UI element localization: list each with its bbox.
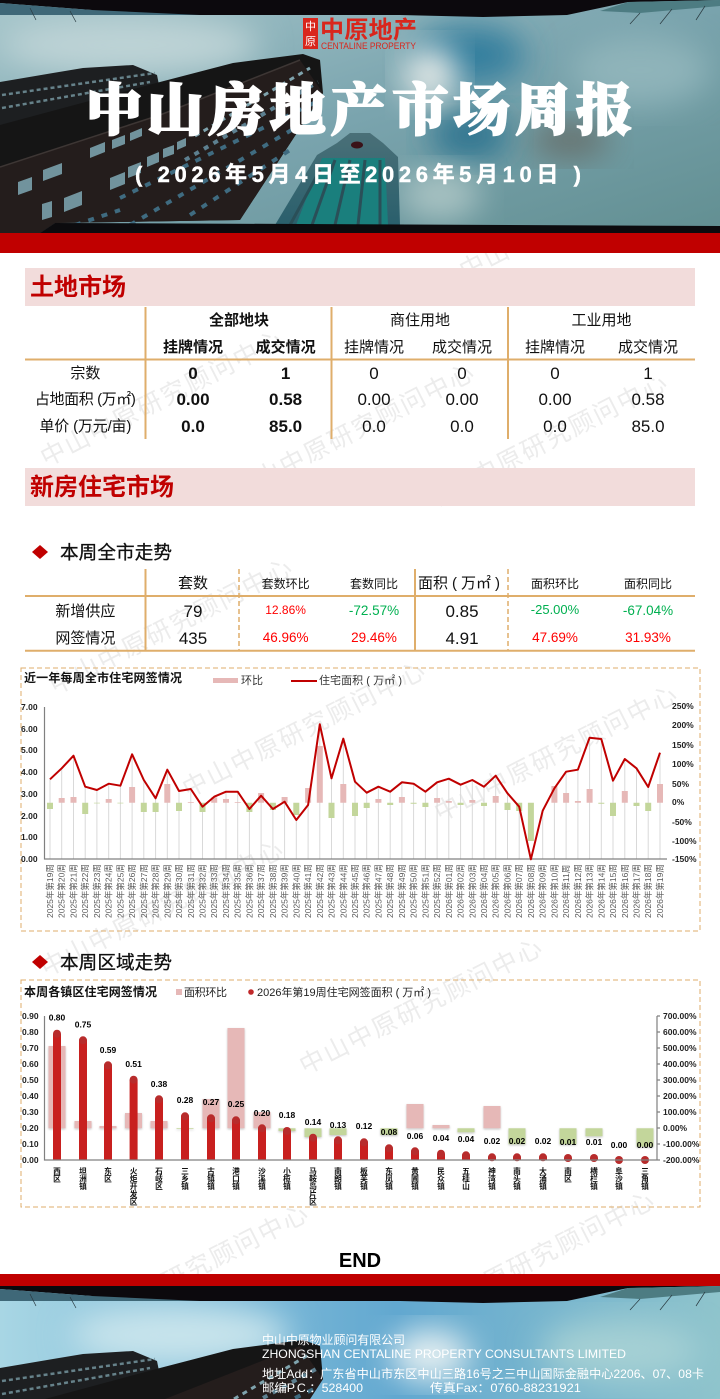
watermark: 中山中原研究顾问中心: [455, 138, 708, 285]
footer contact text: ZHONGSHAN CENTALINE PROPERTY CONSULTANTS LIMITED: [262, 1347, 626, 1361]
week labels: 2025年第35周: [233, 864, 243, 918]
stems: [57, 1034, 594, 1160]
left axis labels: 3.00: [21, 789, 38, 799]
right axis labels: 600.00%: [663, 1027, 697, 1037]
district labels: [52, 1166, 650, 1206]
week labels: 2025年第21周: [68, 864, 78, 918]
right axis labels: 700.00%: [663, 1011, 697, 1021]
land market table: 成交情况: [618, 338, 678, 356]
left axis labels: 0.80: [22, 1027, 39, 1037]
left axis labels: 0.40: [22, 1091, 39, 1101]
right axis labels: -100%: [672, 836, 697, 846]
watermark: 中山中原研究顾问中心: [36, 325, 289, 472]
land market table: 1: [643, 364, 653, 383]
district labels: 横栏镇: [589, 1166, 598, 1191]
value labels: 0.04: [433, 1133, 450, 1143]
pink change bars: [59, 746, 663, 803]
land market table: 0.0: [450, 417, 474, 436]
week labels: 2026年第12周: [573, 864, 583, 918]
district labels: 沙溪镇: [257, 1167, 266, 1191]
weekly city table: 套数: [178, 575, 208, 592]
logo: Centaline Property: 原: [305, 36, 316, 48]
week labels: 2026年第14周: [596, 864, 606, 918]
week labels: 2026年第11周: [561, 865, 571, 918]
left axis labels: 0.10: [22, 1139, 39, 1149]
icon: red diamond: [32, 545, 48, 559]
week labels: 2025年第49周: [397, 864, 407, 918]
value labels: 0.00: [611, 1140, 628, 1150]
left axis labels: 0.30: [22, 1107, 39, 1117]
right axis labels: 0%: [672, 797, 685, 807]
land market table: 挂牌情况: [525, 339, 585, 356]
right axis labels: 200.00%: [663, 1091, 697, 1101]
land market table: 0.0: [543, 417, 567, 436]
district labels: 石岐区: [154, 1167, 164, 1190]
land market table: 85.0: [269, 417, 302, 436]
right axis labels: -100.00%: [663, 1139, 700, 1149]
district labels: 大涌镇: [538, 1166, 548, 1191]
week labels: 2025年第38周: [268, 864, 278, 918]
week labels: 2026年第04周: [479, 864, 489, 918]
watermark: 中山中原研究顾问中心: [61, 1199, 314, 1346]
week labels: 2026年第18周: [643, 864, 653, 918]
left axis labels: 7.00: [21, 702, 38, 712]
value labels: 0.12: [356, 1121, 373, 1131]
value labels: 0.13: [330, 1120, 347, 1130]
weekly city table: 4.91: [445, 629, 479, 648]
week labels: 2025年第43周: [326, 864, 336, 918]
weekly city table: 网签情况: [55, 630, 115, 647]
week labels: 2025年第19周: [45, 864, 55, 918]
value labels: [49, 1012, 654, 1150]
weekly city table: -72.57%: [349, 603, 399, 618]
watermark: 中山中原研究顾问中心: [295, 933, 548, 1080]
weekly city table: 29.46%: [351, 630, 397, 645]
week labels: 2025年第47周: [373, 864, 383, 918]
watermark: 中山中原研究顾问中心: [36, 835, 289, 982]
week labels: 2025年第45周: [350, 864, 360, 918]
weekly city table: 31.93%: [625, 630, 671, 645]
value labels: 0.25: [228, 1099, 245, 1109]
value labels: 0.75: [75, 1020, 92, 1030]
land market table: 0: [550, 364, 560, 383]
legend: 面积环比: [184, 986, 227, 999]
week labels: 2025年第24周: [104, 864, 114, 918]
weekly city table: 套数环比: [262, 576, 310, 591]
value labels: 0.28: [177, 1095, 194, 1105]
week labels: 2025年第32周: [198, 864, 208, 918]
week labels: 2026年第16周: [620, 864, 630, 918]
land market table: 0.00: [176, 390, 210, 409]
left axis labels: [21, 702, 38, 864]
section heading: land market: 土地市场: [30, 274, 126, 301]
red band top: [0, 233, 720, 253]
left axis labels: 0.60: [22, 1059, 39, 1069]
land market table: 0.0: [362, 417, 386, 436]
district labels: 阜沙镇: [614, 1166, 624, 1191]
chart title: 本周各镇区住宅网签情况: [24, 984, 157, 999]
weekly city table: 面积环比: [531, 577, 579, 591]
week labels: 2025年第29周: [162, 864, 172, 918]
value labels: 0.01: [586, 1137, 603, 1147]
week labels: 2025年第39周: [280, 864, 290, 918]
value labels: 0.08: [381, 1127, 398, 1137]
right axis labels: 0.00%: [663, 1123, 688, 1133]
footer contact text: 地址Add：广东省中山市东区中山三路16号之三中山国际金融中心2206、07、08卡: [262, 1366, 704, 1381]
week labels: 2026年第03周: [467, 864, 477, 918]
left axis labels: 0.70: [22, 1043, 39, 1053]
legend: [176, 985, 431, 999]
district labels: 神湾镇: [487, 1166, 496, 1191]
section heading: new housing market: 新房住宅市场: [30, 473, 174, 501]
week labels: 2025年第42周: [315, 864, 325, 918]
value labels: 0.80: [49, 1012, 66, 1022]
right axis labels: 100%: [672, 759, 694, 769]
weekly city table: -67.04%: [623, 603, 673, 618]
footer photo banner: [0, 1286, 720, 1399]
weekly city table: 79: [184, 602, 202, 621]
icon: red diamond: [32, 955, 48, 969]
pink change bars: [48, 1028, 500, 1128]
value labels: 0.51: [125, 1059, 142, 1069]
right axis labels: 400.00%: [663, 1059, 697, 1069]
week labels: 2026年第05周: [491, 864, 501, 918]
week labels: 2025年第27周: [139, 864, 149, 918]
logo: Centaline Property: 中原地产: [320, 17, 417, 44]
land market table: 成交情况: [432, 338, 492, 356]
week labels: 2025年第22周: [80, 864, 90, 918]
legend: 环比: [241, 674, 263, 687]
value labels: 0.14: [305, 1117, 322, 1127]
footer contact text: 传真Fax：0760-88231921: [430, 1380, 581, 1395]
weekly city table: 面积同比: [624, 577, 672, 591]
weekly city table: 46.96%: [263, 630, 308, 645]
week labels: 2026年第01周: [444, 864, 454, 918]
right axis labels: [663, 1011, 700, 1165]
value labels: 0.02: [484, 1136, 501, 1146]
week labels: 2026年第09周: [538, 864, 548, 918]
watermark: 中山中原研究顾问中心: [178, 656, 431, 803]
watermark: 中山中原研究顾问中心: [430, 680, 683, 827]
district labels: 南朗镇: [333, 1166, 342, 1191]
watermark: 中山中原研究顾问中心: [45, 553, 298, 700]
week labels: 2026年第13周: [585, 864, 595, 918]
weekly city table: 套数同比: [350, 576, 398, 591]
value labels: 0.59: [100, 1045, 117, 1055]
district labels: 五桂山: [461, 1167, 470, 1191]
axes: [44, 1016, 660, 1160]
weekly city table: 0.85: [445, 602, 479, 621]
left axis labels: 1.00: [21, 832, 38, 842]
right axis labels: 100.00%: [663, 1107, 697, 1117]
district labels: 港口镇: [231, 1166, 240, 1191]
week labels: 2026年第08周: [526, 864, 536, 918]
value labels: 0.20: [254, 1108, 271, 1118]
left axis labels: 0.20: [22, 1123, 39, 1133]
district labels: 东区: [103, 1166, 112, 1182]
district labels: 三乡镇: [180, 1167, 190, 1191]
week labels: 2025年第31周: [186, 864, 196, 918]
title: 中山房地产市场周报: [86, 67, 632, 147]
weekly city table: 新增供应: [55, 602, 115, 620]
land market table: 0.00: [357, 390, 391, 409]
watermark: 中山中原研究顾问中心: [227, 358, 480, 505]
week labels: 2025年第20周: [57, 864, 67, 918]
weekly city table: 47.69%: [532, 630, 578, 645]
district labels: 南头镇: [512, 1166, 522, 1191]
land market table: 全部地块: [209, 311, 269, 329]
week labels: 2025年第28周: [151, 864, 161, 918]
area line: [50, 724, 660, 859]
date subtitle: ( 2026年5月4日至2026年5月10日 ): [135, 162, 581, 187]
left axis labels: 0.00: [22, 1155, 39, 1165]
right axis labels: [672, 701, 697, 864]
week labels: 2026年第15周: [608, 864, 618, 918]
right axis labels: 500.00%: [663, 1043, 697, 1053]
drop lines: [50, 724, 660, 859]
left axis labels: 0.90: [22, 1011, 39, 1021]
value labels: 0.01: [560, 1137, 577, 1147]
red band bottom: [0, 1274, 720, 1286]
value labels: 0.27: [203, 1097, 220, 1107]
week labels: 2025年第50周: [409, 864, 419, 918]
week labels: 2025年第30周: [174, 864, 184, 918]
district labels: 南区: [563, 1166, 572, 1182]
week labels: 2025年第25周: [115, 864, 125, 918]
week labels: 2025年第41周: [303, 864, 313, 918]
subheading: district trend: 本周区域走势: [60, 952, 172, 973]
land market table: 0.0: [181, 417, 205, 436]
legend: 住宅面积 ( 万㎡ ): [319, 673, 402, 687]
right axis labels: 50%: [672, 779, 689, 789]
week labels: 2025年第48周: [385, 864, 395, 918]
week labels: 2025年第37周: [256, 864, 266, 918]
left axis labels: 0.00: [21, 854, 38, 864]
left axis labels: 2.00: [21, 811, 38, 821]
weekly city table: -25.00%: [531, 602, 580, 617]
week labels: 2025年第46周: [362, 864, 372, 918]
legend: 2026年第19周住宅网签面积 ( 万㎡ ): [257, 985, 431, 999]
land market table: 挂牌情况: [163, 338, 223, 356]
district labels: 坦洲镇: [78, 1166, 88, 1191]
week labels: 2026年第07周: [514, 864, 524, 918]
footer contact text: 邮编P.C.：528400: [262, 1380, 363, 1395]
land market table: 0.58: [269, 390, 302, 409]
value labels: 0.02: [535, 1136, 552, 1146]
legend: [213, 673, 402, 687]
land market table: 单价 (万元/亩): [39, 417, 131, 435]
week labels: 2026年第02周: [456, 864, 466, 918]
week labels: 2025年第23周: [92, 864, 102, 918]
week labels: 2026年第17周: [632, 864, 642, 918]
subheading: city trend: 本周全市走势: [60, 542, 172, 563]
district labels: 民众镇: [436, 1167, 446, 1191]
week labels: 2026年第06周: [502, 864, 512, 918]
week labels: 2025年第26周: [127, 864, 137, 918]
right axis labels: 150%: [672, 740, 694, 750]
footer contact text: 中山中原物业顾问有限公司: [262, 1332, 405, 1347]
land market table: 成交情况: [256, 338, 316, 356]
logo: Centaline Property: CENTALINE PROPERTY: [321, 41, 417, 52]
section heading: land market: [25, 268, 695, 306]
week labels: 2025年第44周: [338, 864, 348, 918]
green change bars: [47, 803, 651, 841]
week labels: 2026年第19周: [655, 864, 665, 918]
district labels: 火炬开发区: [129, 1167, 138, 1206]
left axis labels: 6.00: [21, 724, 38, 734]
land market table: 0.00: [445, 390, 479, 409]
value labels: 0.06: [407, 1131, 424, 1141]
week labels: 2025年第33周: [209, 864, 219, 918]
value labels: 0.38: [151, 1079, 168, 1089]
district labels: 马鞍岛片区: [308, 1167, 318, 1206]
left axis labels: 0.50: [22, 1075, 39, 1085]
land market table: 占地面积 (万㎡): [35, 391, 136, 408]
green change bars: [176, 1128, 654, 1147]
district labels: 东凤镇: [384, 1166, 394, 1191]
district labels: 板芙镇: [359, 1166, 368, 1191]
right axis labels: -50%: [672, 817, 692, 827]
week labels: 2026年第10周: [549, 864, 559, 918]
left axis labels: [22, 1011, 39, 1165]
weekly city table: [25, 569, 695, 651]
chart: district signed area: [21, 980, 700, 1207]
right axis labels: -200.00%: [663, 1155, 700, 1165]
weekly city table: 面积 ( 万㎡ ): [418, 575, 500, 592]
footer contact text: [262, 1332, 704, 1395]
weekly city table: 435: [179, 629, 207, 648]
district labels: 小榄镇: [282, 1166, 292, 1191]
left axis labels: 5.00: [21, 745, 38, 755]
land market table: 工业用地: [571, 312, 632, 329]
land market table: 0.00: [538, 390, 572, 409]
land market table: 0: [457, 364, 467, 383]
week labels: 2025年第36周: [244, 864, 254, 918]
land market table: 1: [281, 364, 290, 383]
left axis labels: 4.00: [21, 767, 38, 777]
right axis labels: 200%: [672, 720, 694, 730]
land market table: 宗数: [70, 364, 100, 382]
section heading: new housing market: [25, 468, 695, 506]
right axis labels: 250%: [672, 701, 694, 711]
axes: [44, 707, 667, 859]
logo: Centaline Property: [303, 17, 417, 52]
land market table: 0: [369, 364, 379, 383]
value labels: 0.02: [509, 1136, 526, 1146]
chart title: 近一年每周全市住宅网签情况: [24, 670, 182, 685]
district labels: 古镇镇: [206, 1166, 216, 1191]
week labels: 2025年第34周: [221, 864, 231, 918]
land market table: 0.58: [631, 390, 665, 409]
land market table: 挂牌情况: [344, 339, 404, 356]
value labels: 0.00: [637, 1140, 654, 1150]
chart: weekly citywide signed area: [21, 668, 700, 931]
right axis labels: 300.00%: [663, 1075, 697, 1085]
district labels: 黄圃镇: [410, 1166, 420, 1191]
land market table: [25, 307, 695, 439]
district labels: 西区: [52, 1167, 62, 1182]
watermark: 中山中原研究顾问中心: [407, 1186, 660, 1333]
right axis labels: -150%: [672, 854, 697, 864]
land market table: 商住用地: [390, 312, 450, 329]
logo: Centaline Property: 中: [305, 20, 316, 33]
watermark: 中山中原研究顾问中心: [420, 368, 673, 515]
land market table: 85.0: [631, 417, 665, 436]
week labels: 2025年第40周: [291, 864, 301, 918]
END marker: END: [339, 1250, 381, 1272]
week labels: 2025年第52周: [432, 864, 442, 918]
header photo banner: [0, 0, 720, 233]
weekly city table: 12.86%: [265, 603, 306, 617]
land market table: 0: [188, 364, 198, 383]
value labels: 0.18: [279, 1110, 296, 1120]
week labels: [45, 864, 665, 918]
value labels: 0.04: [458, 1134, 475, 1144]
dots: [53, 1030, 649, 1164]
week labels: 2025年第51周: [420, 864, 430, 918]
district labels: 三角镇: [640, 1167, 650, 1191]
